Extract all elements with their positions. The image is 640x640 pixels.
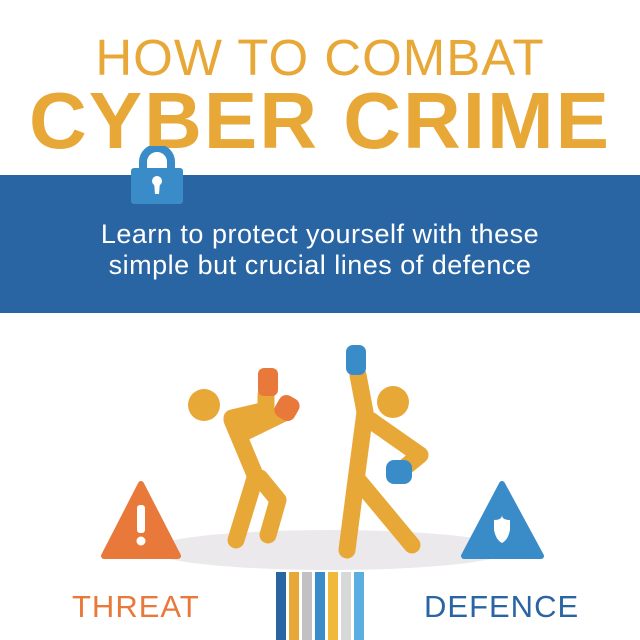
color bars — [276, 572, 364, 640]
subtitle text — [101, 219, 539, 280]
label: defence: DEFENCE — [424, 589, 579, 624]
label: threat: THREAT — [72, 589, 200, 624]
title line 2: CYBER CRIME — [29, 76, 611, 165]
blue banner — [0, 175, 640, 313]
title line 1: HOW TO COMBAT — [95, 29, 545, 86]
figure: defender — [347, 375, 420, 550]
icon: padlock — [131, 146, 183, 204]
icon: defence triangle with shield — [464, 484, 541, 556]
ground ellipse — [150, 530, 510, 570]
subtitle text: simple but crucial lines of defence — [109, 250, 531, 280]
subtitle text: Learn to protect yourself with these — [101, 219, 539, 249]
icon: threat triangle — [104, 484, 178, 556]
figure: attacker — [188, 389, 282, 540]
illustration: boxers — [101, 345, 544, 640]
